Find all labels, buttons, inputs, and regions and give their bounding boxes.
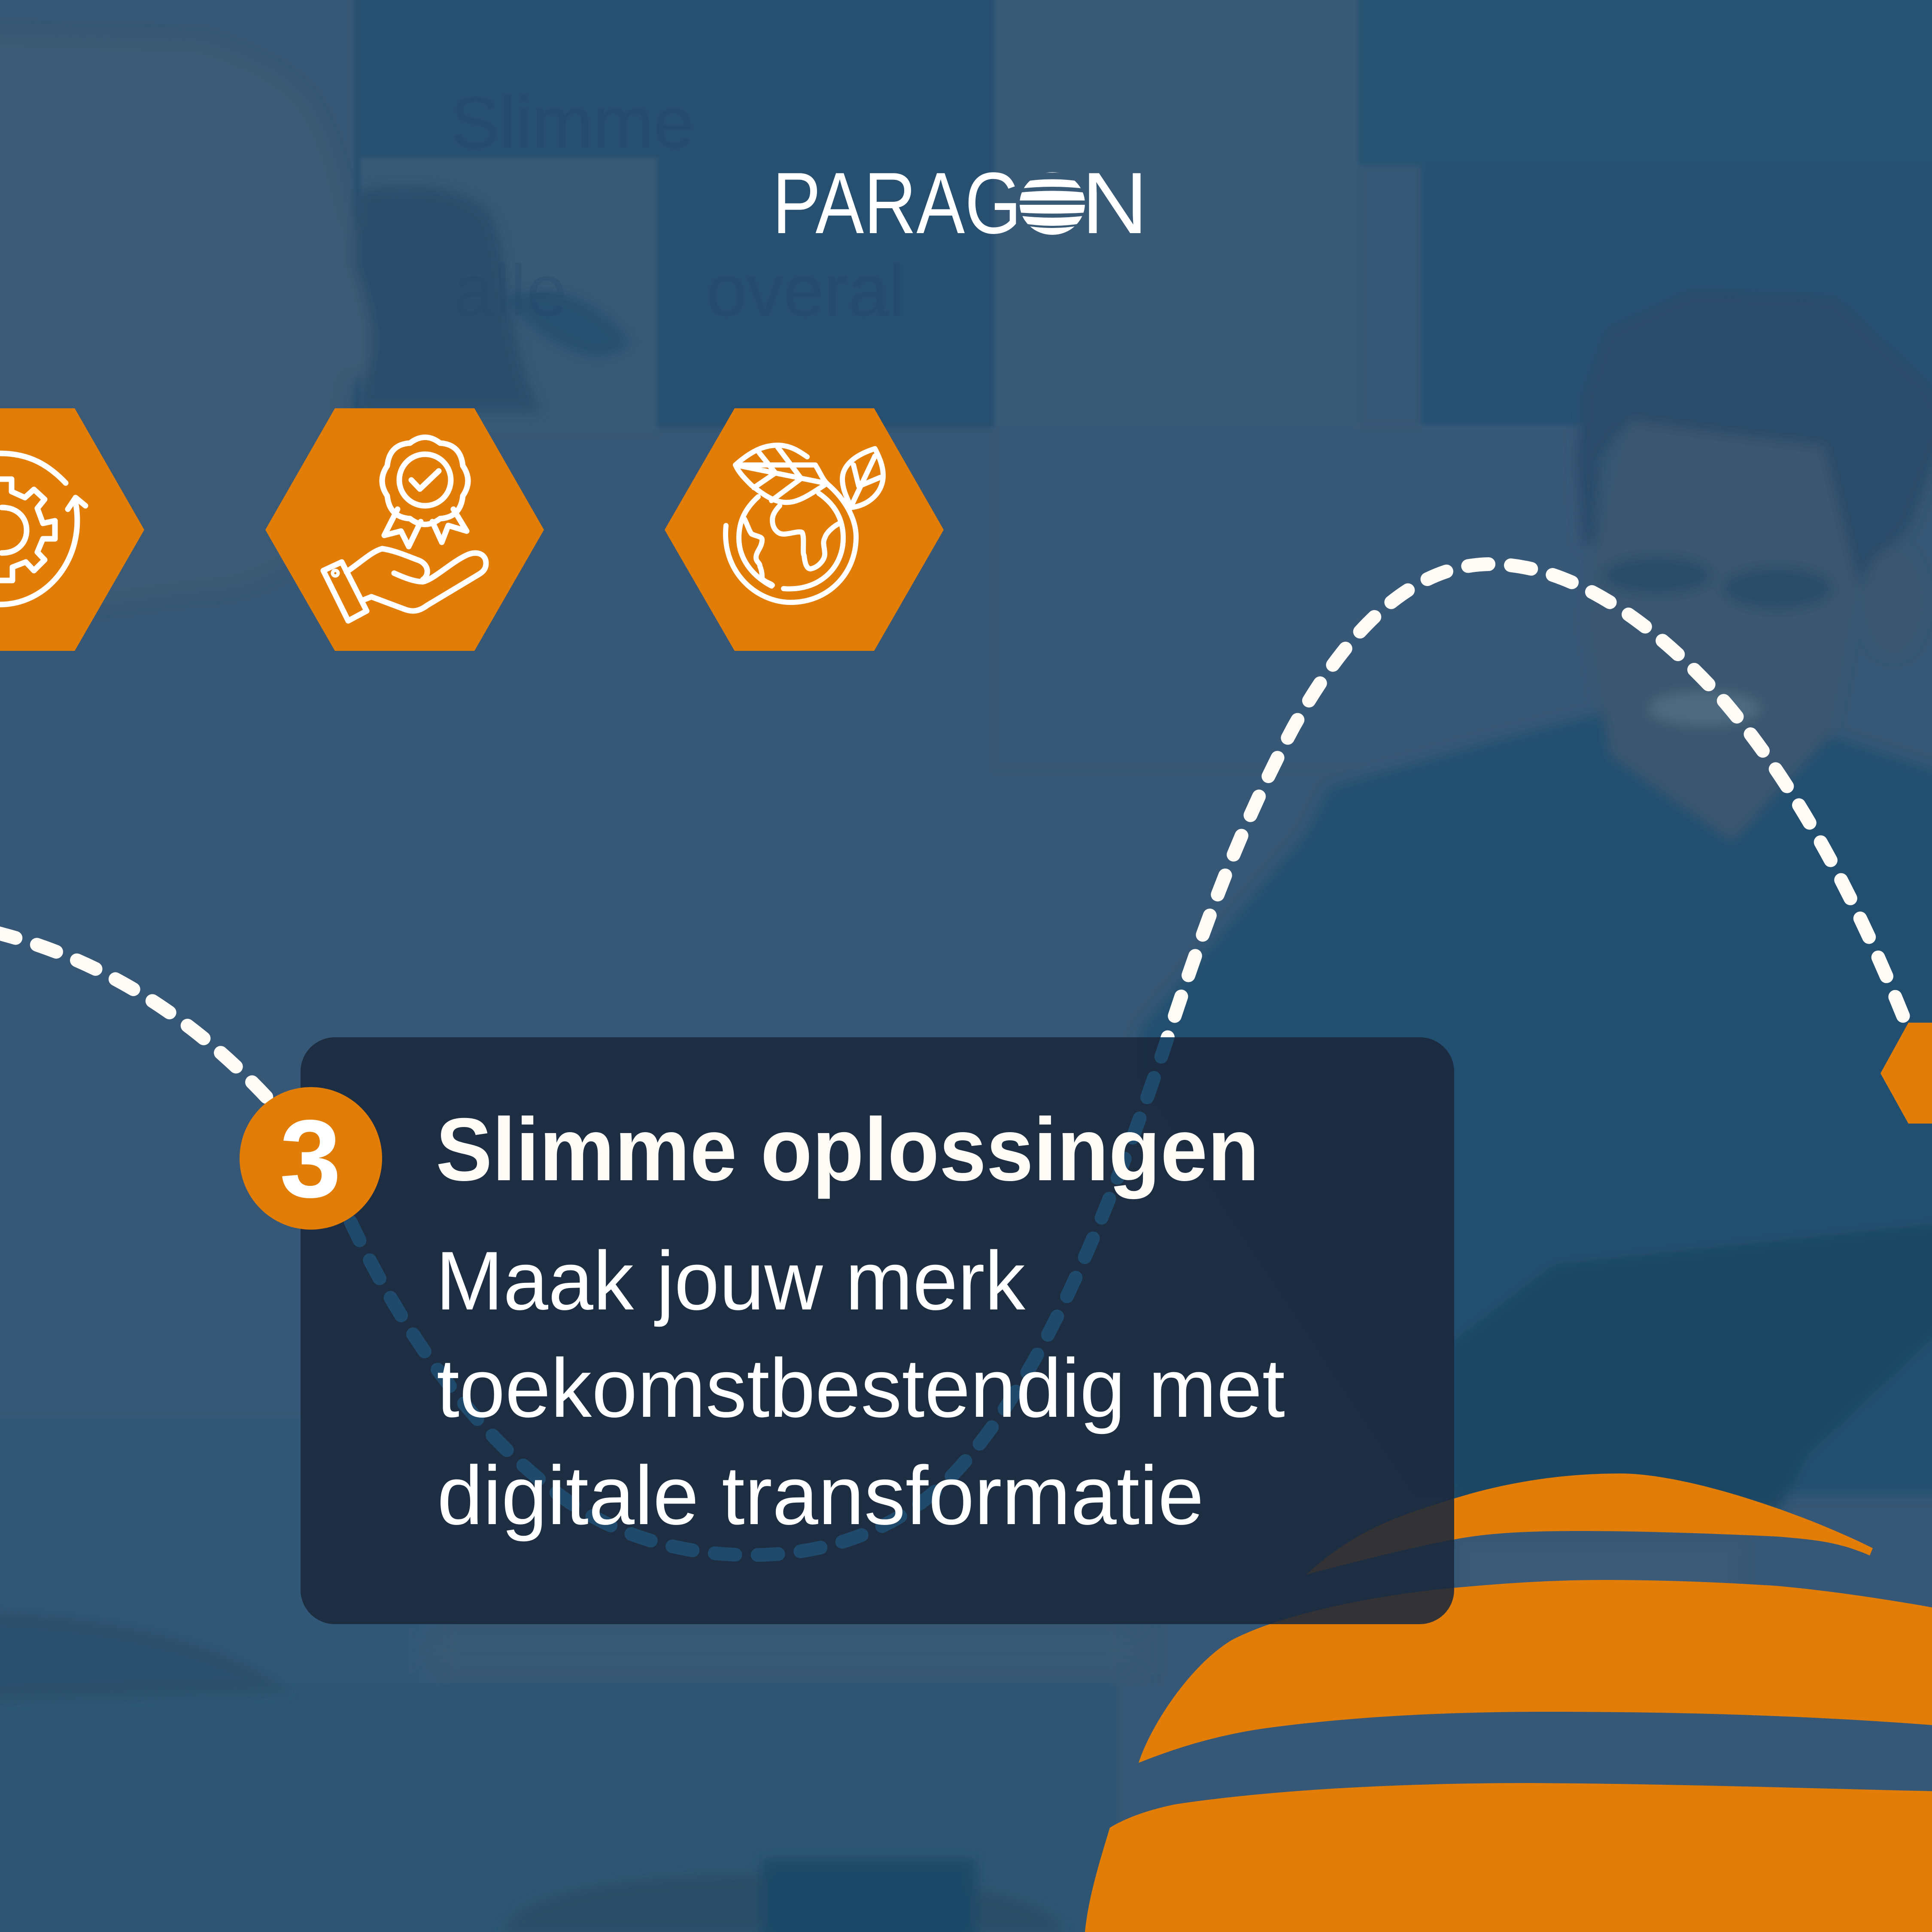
step number badge: 3 bbox=[279, 1097, 341, 1221]
left man: head bbox=[0, 32, 394, 623]
background: tinted photo of two men at a laptop: Slimme bbox=[451, 82, 694, 164]
bookshelf panel, top centre bbox=[355, 0, 994, 427]
right man: face bbox=[1588, 420, 1858, 841]
step number badge bbox=[240, 1087, 382, 1230]
panel body text: toekomstbestendig met bbox=[437, 1342, 1285, 1435]
desk and lower shapes bbox=[1460, 1541, 1739, 1593]
hexagon: gear and cycle icon bbox=[0, 408, 144, 651]
background: tinted photo of two men at a laptop: overal bbox=[706, 250, 905, 331]
icon: earth with two leaves bbox=[726, 445, 883, 602]
logo: Paragon wordmark: N bbox=[1081, 155, 1148, 252]
dashed path: blue inside the panel bbox=[0, 564, 1911, 1555]
small hexagon at right edge bbox=[1880, 1023, 1932, 1124]
text panel: dark rounded box bbox=[301, 1037, 1454, 1624]
hexagon: award in hand icon bbox=[265, 408, 544, 651]
right man: hair bbox=[1577, 289, 1932, 585]
panel body text: Maak jouw merk bbox=[436, 1234, 1026, 1327]
icon: rosette above open hand bbox=[323, 437, 486, 621]
orange globe stripes, lower right bbox=[1085, 1473, 1932, 1932]
panel body text bbox=[436, 1234, 1285, 1542]
background: tinted photo of two men at a laptop: alle bbox=[453, 250, 567, 331]
right man: body and shirt bbox=[1139, 713, 1932, 1494]
logo globe bbox=[1020, 172, 1085, 235]
panel body text: digitale transformatie bbox=[437, 1449, 1204, 1542]
dashed path: white outside the panel bbox=[0, 557, 1910, 1104]
logo: Paragon wordmark bbox=[778, 172, 1140, 235]
icon: gear with circular arrow bbox=[0, 453, 85, 605]
laptop bbox=[1451, 1222, 1932, 1511]
logo: Paragon wordmark: PARAG bbox=[772, 155, 1021, 252]
hexagon: globe with leaves icon bbox=[665, 408, 944, 651]
panel heading: Slimme oplossingen bbox=[436, 1100, 1259, 1200]
